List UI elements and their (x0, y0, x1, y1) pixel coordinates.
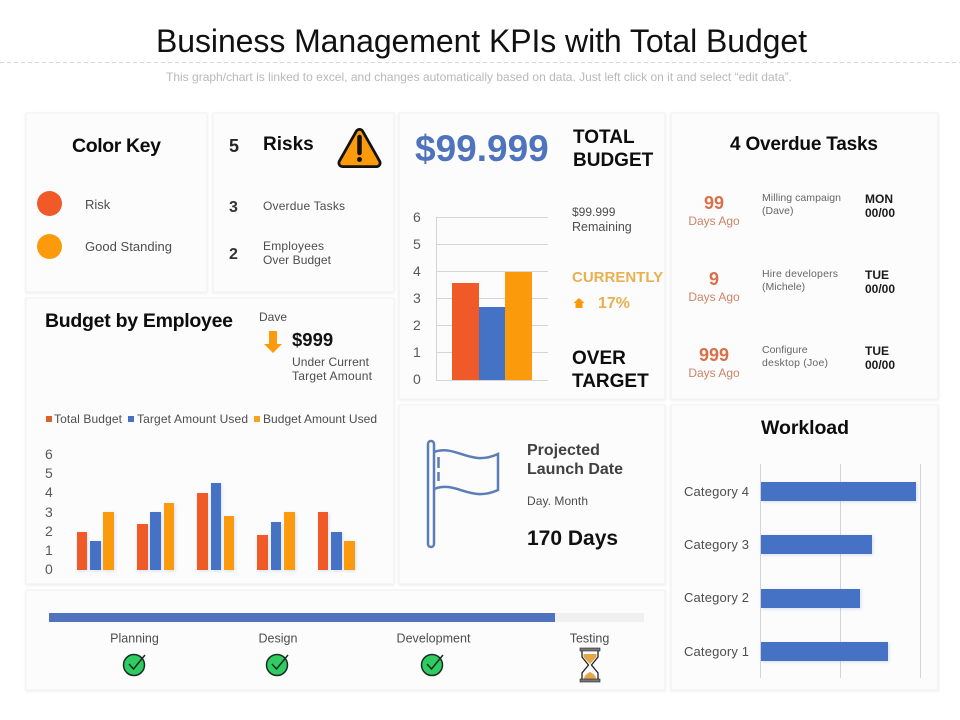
bar chart: budget by employee: 4 (45, 484, 53, 500)
bar chart: total budget: 5 (413, 236, 421, 252)
bar chart: budget by employee: 0 (45, 561, 53, 577)
bar chart: total budget: 3 (413, 290, 421, 306)
over target label: OVER (572, 348, 626, 369)
stage: testing: Testing (570, 632, 609, 646)
heading: budget by employee: Budget by Employee (45, 310, 233, 332)
bar chart: budget by employee: 5 (45, 465, 53, 481)
label: risk: Risk (85, 197, 111, 212)
heading: color key: Color Key (72, 135, 161, 157)
task: hire developers: 9 (709, 269, 719, 289)
risk total: 5 (229, 136, 239, 156)
over target label (572, 348, 649, 392)
remaining: $99.999 (572, 205, 616, 219)
task: configure desktop: desktop (Joe) (762, 357, 828, 369)
launch heading (527, 442, 623, 478)
stage: testing (570, 632, 609, 682)
total budget label: TOTAL (573, 127, 635, 148)
total budget label: BUDGET (573, 150, 654, 171)
currently (572, 269, 663, 312)
legend (46, 412, 377, 426)
panel: projected launch date (399, 405, 665, 584)
bar chart: workload (684, 464, 920, 678)
task: hire developers: 00/00 (865, 282, 895, 296)
task: milling campaign (688, 192, 895, 228)
icon: good standing dot (37, 234, 62, 259)
task: milling campaign: (Dave) (762, 205, 794, 217)
task: configure desktop: 999 (699, 345, 729, 365)
risk: employees over budget: 2 (229, 246, 238, 263)
callout: dave: $999 (292, 329, 333, 350)
bar chart: workload: Category 1 (684, 644, 749, 659)
callout: dave (259, 310, 373, 383)
bar chart: budget by employee: 1 (45, 542, 53, 558)
days remaining: 170 Days (527, 527, 618, 550)
bar chart: total budget (413, 209, 548, 387)
launch heading: Projected (527, 442, 600, 459)
task: milling campaign: Days Ago (688, 214, 740, 228)
legend: Budget Amount Used (263, 412, 377, 426)
risk: overdue tasks: 3 (229, 199, 238, 216)
stage: design (259, 632, 297, 676)
icon: risk dot (37, 191, 62, 216)
callout: dave: Under Current (292, 355, 370, 369)
bar chart: total budget: 0 (413, 371, 421, 387)
panel: color key (26, 113, 207, 292)
currently: 17% (598, 295, 630, 312)
heading: overdue tasks: 4 Overdue Tasks (730, 134, 878, 155)
heading: workload: Workload (761, 417, 849, 439)
total budget label (573, 127, 654, 171)
task: milling campaign: MON (865, 192, 893, 206)
launch heading: Launch Date (527, 461, 623, 478)
panel: project progress (26, 590, 665, 690)
task: hire developers: Days Ago (688, 290, 740, 304)
bar chart: budget by employee: 3 (45, 504, 53, 520)
panel: overdue tasks (671, 113, 938, 399)
panel: workload (671, 405, 938, 690)
stage: planning: Planning (110, 632, 159, 646)
risk: employees over budget: Over Budget (263, 253, 332, 267)
stage: development (396, 632, 471, 676)
subtitle: This graph/chart is linked to excel, and changes automatically based on data. Just left click on it and select “edit data”. (166, 70, 792, 84)
task: milling campaign: 00/00 (865, 206, 895, 220)
callout: dave: Target Amount (292, 369, 373, 383)
panel: risks (213, 113, 394, 292)
legend: Total Budget (54, 412, 123, 426)
bar chart: total budget: 4 (413, 263, 421, 279)
task: configure desktop: 00/00 (865, 358, 895, 372)
risk: employees over budget (229, 239, 332, 267)
bar chart: total budget: 1 (413, 344, 421, 360)
bar chart: total budget: 2 (413, 317, 421, 333)
stage: design: Design (259, 632, 297, 646)
task: hire developers: Hire developers (762, 268, 838, 280)
risk: employees over budget: Employees (263, 239, 324, 253)
panel: budget by employee (26, 298, 394, 584)
bar chart: budget by employee: 6 (45, 446, 53, 462)
heading: risks: Risks (263, 134, 314, 155)
icon: warning triangle (342, 133, 376, 163)
task: configure desktop: Days Ago (688, 366, 740, 380)
label: good standing: Good Standing (85, 239, 172, 254)
remaining (572, 205, 632, 234)
task: configure desktop (688, 344, 895, 380)
bar chart: workload: Category 3 (684, 537, 749, 552)
bar chart: budget by employee (45, 446, 355, 577)
stage: development: Development (396, 632, 471, 646)
task: milling campaign: Milling campaign (762, 192, 841, 204)
icon: hourglass (580, 648, 600, 682)
over target label: TARGET (572, 371, 649, 392)
bar chart: workload: Category 2 (684, 590, 749, 605)
legend: Target Amount Used (137, 412, 248, 426)
task: configure desktop: TUE (865, 344, 889, 358)
title: Business Management KPIs with Total Budget (156, 23, 807, 59)
stage: planning (110, 632, 159, 676)
remaining: Remaining (572, 220, 632, 234)
risk: overdue tasks (229, 199, 345, 216)
risk: overdue tasks: Overdue Tasks (263, 199, 345, 213)
task: hire developers (688, 268, 895, 304)
bar chart: workload: Category 4 (684, 484, 749, 499)
panel: total budget (399, 113, 665, 399)
icon: flag (428, 441, 498, 547)
task: hire developers: (Michele) (762, 281, 805, 293)
total budget value: $99.999 (415, 128, 549, 169)
bar chart: budget by employee: 2 (45, 523, 53, 539)
progress bar (49, 613, 644, 622)
task: configure desktop: Configure (762, 344, 808, 356)
currently: CURRENTLY (572, 269, 663, 286)
launch date: Day. Month (527, 494, 588, 508)
task: milling campaign: 99 (704, 193, 724, 213)
callout: dave: Dave (259, 310, 287, 324)
bar chart: total budget: 6 (413, 209, 421, 225)
task: hire developers: TUE (865, 268, 889, 282)
